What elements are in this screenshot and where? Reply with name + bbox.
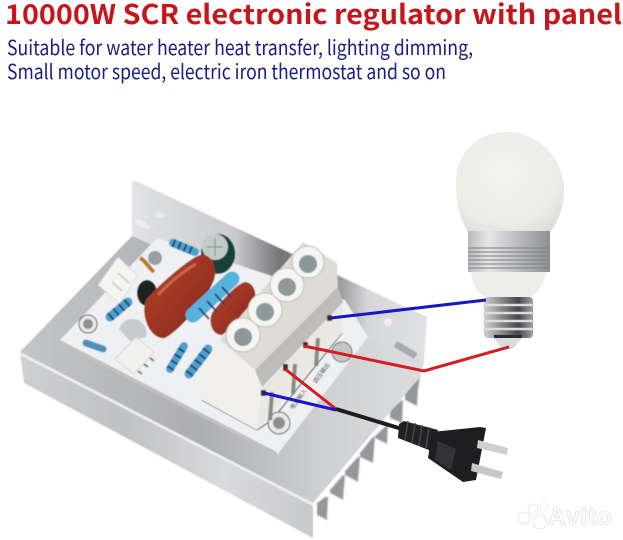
ridge xyxy=(255,287,343,387)
subtitle xyxy=(7,31,473,85)
strain relief xyxy=(398,421,438,452)
terminal screws xyxy=(226,246,324,352)
pins xyxy=(477,440,508,455)
board labels: 电源输入 xyxy=(287,386,309,411)
Avito watermark: Avito xyxy=(548,503,612,531)
printed board lines xyxy=(202,333,342,430)
subtitle: Small motor speed, electric iron thermostat and so on xyxy=(7,55,446,85)
red film capacitor small xyxy=(210,282,255,335)
front-left face xyxy=(202,340,257,430)
aluminium heat sink xyxy=(20,181,427,538)
board labels: 调压输出 xyxy=(310,360,332,385)
bulb neck xyxy=(471,272,546,297)
board labels xyxy=(287,360,332,411)
aluminium collar xyxy=(468,231,550,272)
screw base xyxy=(483,297,534,349)
flange mounting holes xyxy=(134,212,418,359)
plug body xyxy=(428,427,486,482)
blue resistors xyxy=(86,243,232,374)
cooling fins xyxy=(317,377,420,520)
green electrolytic capacitor xyxy=(201,234,235,274)
base top surface xyxy=(20,236,424,503)
top sloped face xyxy=(220,242,338,370)
white connector xyxy=(98,257,137,304)
white circuit board xyxy=(60,234,368,456)
terminal block xyxy=(202,242,343,430)
bulb glass xyxy=(456,132,564,232)
small black capacitor xyxy=(137,280,157,306)
pcb screws xyxy=(79,251,352,434)
socket columns xyxy=(257,302,343,430)
subtitle: Suitable for water heater heat transfer, lighting dimming, xyxy=(7,31,473,61)
Avito watermark xyxy=(518,502,612,531)
red wire to bulb xyxy=(304,346,509,371)
front face xyxy=(20,352,313,538)
back mounting flange xyxy=(132,181,427,362)
red film capacitor large xyxy=(144,255,215,338)
wire sockets xyxy=(261,315,332,396)
light bulb xyxy=(456,132,564,349)
power plug xyxy=(336,409,508,482)
mounting hole xyxy=(119,319,147,341)
blue wire to bulb xyxy=(331,300,486,318)
optocoupler xyxy=(115,337,154,374)
red wire to plug xyxy=(285,369,336,409)
blue wire to plug xyxy=(264,393,336,410)
cord xyxy=(336,409,402,429)
